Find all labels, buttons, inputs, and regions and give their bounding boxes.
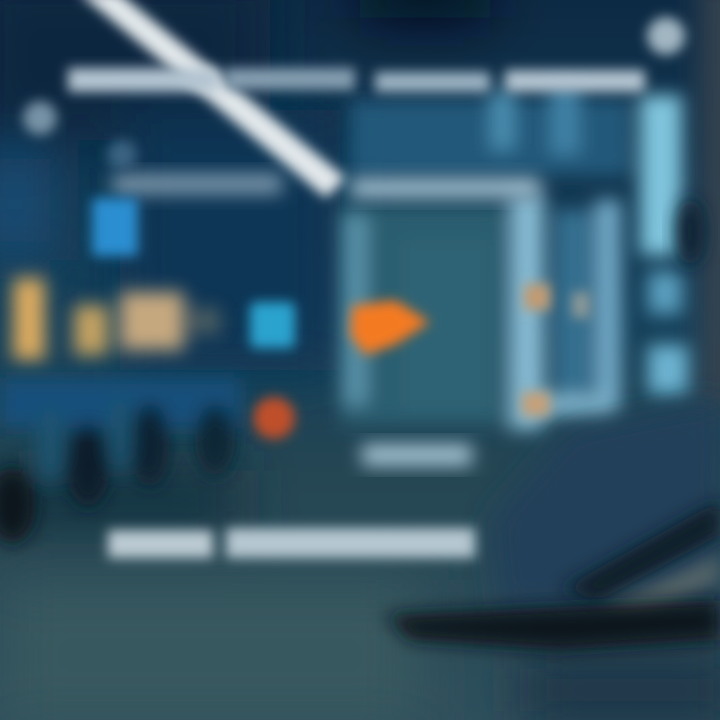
icon: blue square (92, 198, 138, 256)
yellow chart bars (13, 278, 220, 360)
left dark arches (0, 378, 240, 543)
right edge column (700, 0, 720, 410)
diagonal white stripe (78, 0, 346, 198)
dark blob beside right panel (676, 198, 704, 266)
corner dots (23, 17, 685, 170)
dashboard panel: light blue frame (340, 85, 688, 430)
sub heading bar (112, 174, 540, 198)
laptop (385, 400, 720, 650)
caption large (108, 528, 476, 558)
icon: orange arrow (350, 300, 430, 355)
small tan markers (522, 284, 590, 416)
caption small (362, 444, 472, 466)
icon: cyan square (250, 302, 295, 348)
heading bar (68, 68, 645, 92)
icon: red circle (253, 397, 295, 439)
